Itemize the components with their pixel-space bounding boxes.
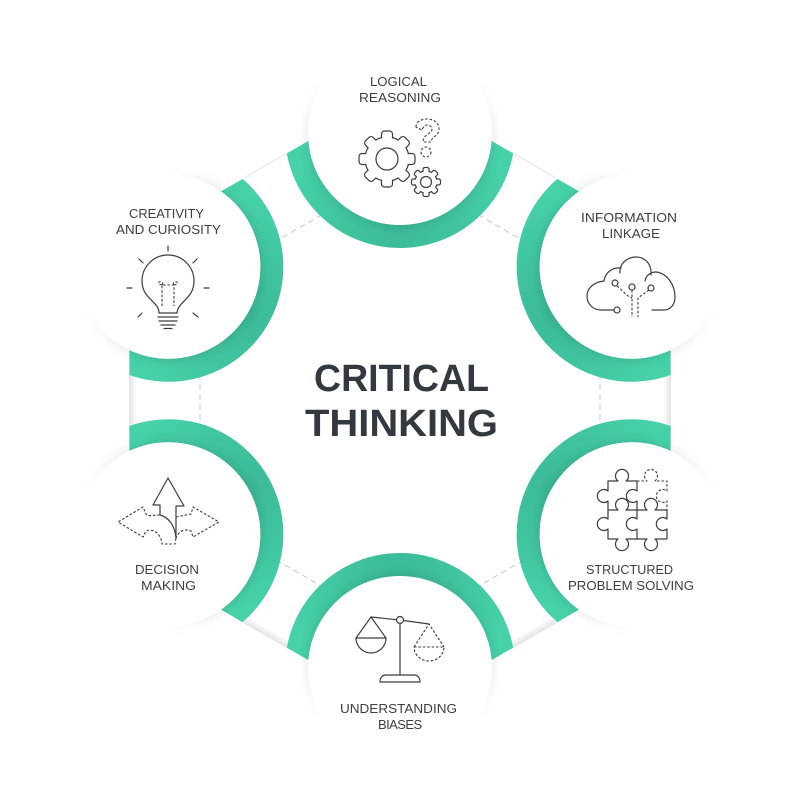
heading: logical reasoning: LOGICAL — [370, 74, 427, 89]
inner dashed hexagon — [200, 170, 600, 632]
icon: three-way arrows — [118, 478, 219, 544]
heading: information linkage: LINKAGE — [602, 226, 660, 241]
panel: understanding biases — [296, 564, 504, 772]
icon: puzzle pieces — [597, 469, 667, 551]
heading: understanding biases: BIASES — [378, 717, 423, 732]
icon: light bulb — [127, 246, 209, 328]
panel: decision making — [27, 393, 310, 676]
heading: understanding biases: UNDERSTANDING — [340, 701, 457, 716]
heading: creativity and curiosity: AND CURIOSITY — [116, 222, 221, 237]
title — [305, 358, 498, 445]
heading: information linkage: INFORMATION — [581, 210, 677, 225]
panel: information linkage — [490, 125, 773, 408]
heading: understanding biases — [340, 701, 457, 732]
heading: structured problem solving: PROBLEM SOLVING — [568, 578, 694, 593]
panel: creativity and curiosity — [27, 125, 310, 408]
heading: logical reasoning: REASONING — [359, 90, 441, 105]
heading: decision making: MAKING — [141, 578, 196, 593]
outer hexagon connector bands — [129, 153, 671, 650]
title: CRITICAL — [314, 358, 489, 400]
icon: cloud network — [587, 257, 675, 317]
icon: balance scale — [356, 616, 444, 682]
heading: creativity and curiosity: CREATIVITY — [129, 206, 204, 221]
panel: logical reasoning — [296, 30, 504, 236]
heading: structured problem solving: STRUCTURED — [586, 562, 673, 577]
heading: decision making: DECISION — [135, 562, 199, 577]
icon: gears and question mark — [359, 119, 440, 196]
title: THINKING — [305, 403, 498, 445]
panel: structured problem solving — [490, 393, 773, 676]
